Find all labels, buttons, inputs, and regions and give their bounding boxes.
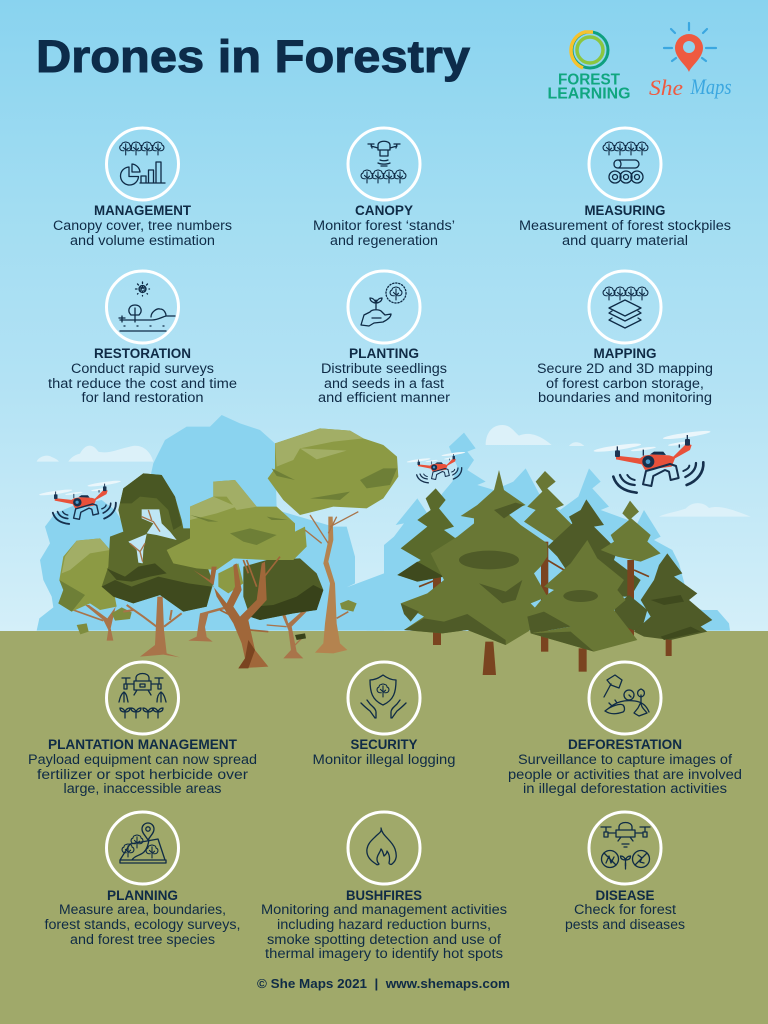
forest illustration [37,415,751,675]
panel: mapping: of forest carbon storage, [546,376,704,391]
icon: axe and felled trees [604,675,649,716]
panel: security: Monitor illegal logging [312,752,456,767]
panel: planning: forest stands, ecology surveys, [44,917,240,932]
panel: deforestation [508,662,742,796]
title: Drones in Forestry [36,31,470,82]
panel: security: SECURITY [350,737,418,752]
panel: plantation management: fertilizer or spot herbicide over [37,767,249,782]
blue background trees [37,415,730,631]
panel: mapping: Secure 2D and 3D mapping [537,361,713,376]
panel: canopy: and regeneration [330,233,438,248]
panel: planning: Measure area, boundaries, [59,902,226,917]
icon: spraying drone [119,674,166,718]
panel: planting [318,271,451,405]
clouds [37,425,751,517]
panel: plantation management: PLANTATION MANAGEMENT [48,737,238,752]
panel: restoration: RESTORATION [94,346,191,361]
sky background [0,0,768,632]
panel: management: Canopy cover, tree numbers [53,218,232,233]
panel: measuring: and quarry material [562,233,688,248]
tree: back trunk [188,606,227,642]
panel: disease [565,812,685,932]
panel: planning [44,812,240,947]
logo: Forest Learning: LEARNING [548,86,630,102]
panel: planting: PLANTING [349,346,419,361]
icon: flame [367,828,396,865]
icon: shield and hands [361,675,406,718]
ground [0,631,768,1024]
panel: mapping [537,271,713,405]
panel: planting: and seeds in a fast [324,376,444,391]
conifers [397,470,712,675]
panel: bushfires: Monitoring and management activities [261,902,507,917]
panel: security [312,662,456,767]
panel: disease: Check for forest [574,902,676,917]
panel: canopy: Monitor forest ‘stands’ [313,218,455,233]
icon: drone over trees [361,141,406,183]
large drone [593,429,711,493]
logo: She Maps: Maps [690,74,732,99]
panel: planting: Distribute seedlings [321,361,447,376]
footer credit: © She Maps 2021 | www.shemaps.com [257,976,510,991]
logo: She Maps [649,23,732,100]
panel: planting: and efficient manner [318,390,451,405]
panel: bushfires: including hazard reduction burns, [277,917,491,932]
panel: restoration: for land restoration [82,390,204,405]
logo: Forest Learning [548,32,630,102]
logo: Forest Learning: FOREST [558,72,621,88]
panel: disease: DISEASE [596,888,654,903]
panel: management [53,128,232,248]
icon: trees over layers [603,287,648,328]
panel: disease: pests and diseases [565,917,685,932]
panel: restoration: Conduct rapid surveys [71,361,214,376]
panel: planning: PLANNING [107,888,178,903]
panel: bushfires: BUSHFIRES [346,888,422,903]
panel: deforestation: people or activities that are involved [508,767,742,782]
icon: hand with seedling [361,283,406,326]
panel: mapping: MAPPING [594,346,656,361]
icon: trees and logs [603,142,648,183]
icon: sun and landscape [119,282,175,331]
panel: bushfires [261,812,507,961]
panel: plantation management: Payload equipment can now spread [28,752,257,767]
icon: map and pin [120,823,166,863]
panel: measuring [519,128,731,248]
panel: deforestation: in illegal deforestation activities [523,781,727,796]
panel: measuring: Measurement of forest stockpiles [519,218,731,233]
panel: bushfires: smoke spotting detection and use of [267,932,501,947]
panel: canopy [313,128,455,248]
panel: mapping: boundaries and monitoring [538,390,712,405]
icon: drone and pests [601,822,650,869]
left drone [39,480,121,524]
panel: restoration: that reduce the cost and time [48,376,237,391]
tree: middle light canopy [167,480,307,668]
tree: tall right [268,428,398,653]
panel: deforestation: DEFORESTATION [568,737,682,752]
logo: She Maps: She [649,75,683,100]
panel: management: and volume estimation [70,233,215,248]
panel: measuring: MEASURING [584,203,666,218]
panel: deforestation: Surveillance to capture images of [518,752,732,767]
panel: planning: and forest tree species [70,932,215,947]
tree: right dark [243,558,323,658]
panel: restoration [48,271,237,405]
panel: management: MANAGEMENT [94,203,192,218]
tree: dark canopy [102,473,213,657]
panel: bushfires: thermal imagery to identify hot spots [265,946,503,961]
icon: trees and charts [120,142,165,185]
panel: plantation management [28,662,257,796]
tree: small left [58,538,132,641]
panel: plantation management: large, inaccessible areas [64,781,222,796]
middle drone [407,451,465,483]
panel: canopy: CANOPY [355,203,413,218]
